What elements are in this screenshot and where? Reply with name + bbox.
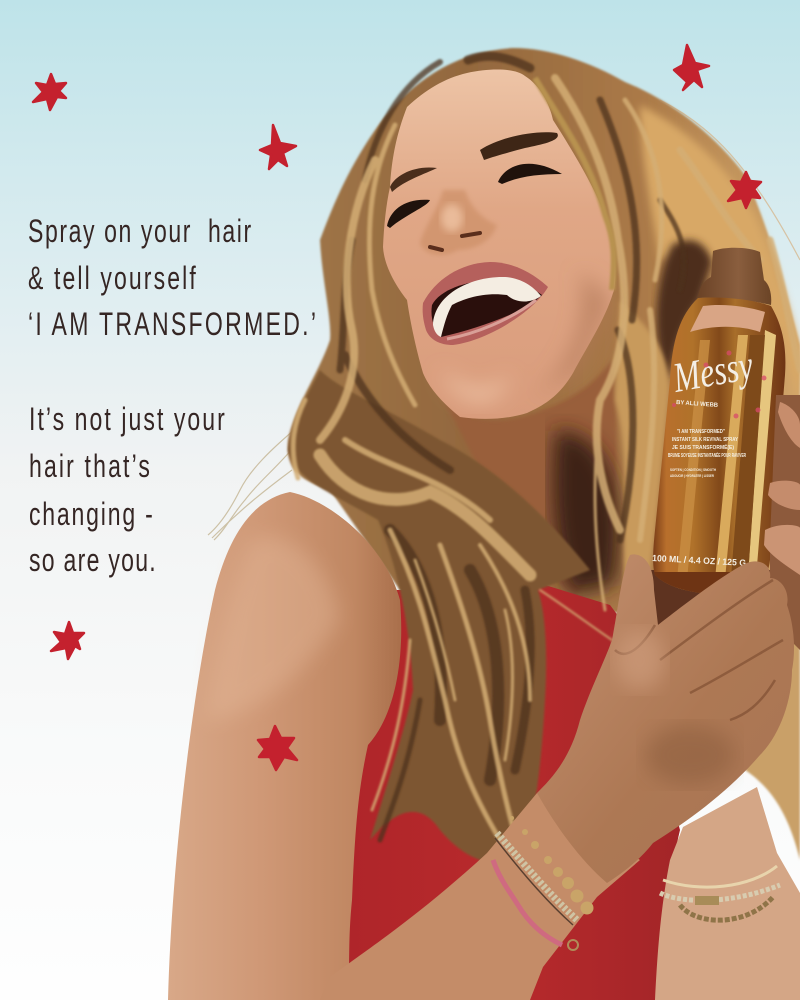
golden hair at lower right xyxy=(745,600,800,860)
star lower middle xyxy=(258,726,297,770)
label: product name: SOFTEN | CONDITION | SMOOTH xyxy=(670,467,716,472)
bottle body xyxy=(653,297,785,594)
shadow under bottle xyxy=(640,570,775,650)
shoulder highlight xyxy=(205,537,340,720)
logo: Messy: Messy xyxy=(669,343,757,402)
hair strands xyxy=(293,56,800,860)
bottle reflections xyxy=(654,330,776,593)
star top left xyxy=(33,74,66,110)
lips xyxy=(423,262,548,345)
star top right xyxy=(674,45,709,90)
text block: changing message: changing - xyxy=(29,496,153,532)
red top xyxy=(320,585,680,1000)
bottle shoulder highlight xyxy=(690,305,765,332)
label: product name: "I AM TRANSFORMED" xyxy=(677,429,726,435)
label: size text: 100 ML / 4.4 OZ / 125 G xyxy=(652,553,746,568)
label: product name xyxy=(668,429,746,478)
nose highlight xyxy=(441,204,463,232)
hair back mass xyxy=(288,48,800,620)
text block: spray message: ‘I AM TRANSFORMED.’ xyxy=(28,306,316,342)
hair left of the bottle xyxy=(615,300,668,590)
stars xyxy=(33,45,761,770)
bracelets left wrist xyxy=(493,816,594,950)
mouth interior xyxy=(431,281,542,337)
finger 2 xyxy=(768,481,800,510)
finger creases xyxy=(615,580,783,720)
bottle xyxy=(652,248,786,593)
eyebrow left xyxy=(390,167,437,192)
hand highlight xyxy=(615,630,665,690)
crystal band xyxy=(497,833,577,920)
bottle cap xyxy=(698,248,771,305)
crystal bracelet xyxy=(660,885,780,900)
thin gold bangle xyxy=(663,866,777,887)
star right xyxy=(728,172,761,208)
fingers on bottle xyxy=(764,395,800,650)
clasp xyxy=(695,896,719,905)
bracelets right wrist xyxy=(660,866,780,920)
woman xyxy=(168,48,800,1000)
hair front fall xyxy=(288,370,590,864)
cheek and jaw shading xyxy=(440,270,610,401)
finger 3 xyxy=(764,525,800,575)
right hair strand over face edge xyxy=(535,78,614,290)
teeth xyxy=(433,277,541,337)
label: product name: ADOUCIR | HYDRATER | LISSER xyxy=(670,473,714,478)
small chain xyxy=(568,940,578,950)
neck shadow xyxy=(552,430,620,595)
eye left xyxy=(387,200,430,228)
nostrils xyxy=(430,233,480,250)
stray hair wisps xyxy=(208,100,800,540)
neck xyxy=(440,360,617,595)
chain bracelet xyxy=(680,897,773,920)
text block: changing message: It’s not just your xyxy=(29,401,225,437)
text block: changing message xyxy=(29,401,225,578)
hand shading xyxy=(615,580,783,785)
right arm lower xyxy=(655,787,800,1000)
hand xyxy=(537,554,794,883)
nose xyxy=(420,190,497,255)
mouth xyxy=(423,262,548,345)
finger 1 xyxy=(778,402,800,448)
pink bead bracelet xyxy=(493,860,562,945)
face xyxy=(383,70,615,419)
label: product name: JE SUIS TRANSFORMÉ(E) xyxy=(672,443,734,451)
eyebrow right xyxy=(480,132,558,160)
star upper middle xyxy=(260,125,296,169)
text block: changing message: hair that’s xyxy=(29,448,150,484)
text block: spray message: & tell yourself xyxy=(28,260,196,296)
label: by Alli Webb: BY ALLI WEBB xyxy=(676,400,719,409)
hair dark area beside the bottle xyxy=(657,240,712,380)
left forearm xyxy=(320,793,640,1000)
crystal band shadow xyxy=(495,838,573,925)
eye right xyxy=(498,164,562,184)
bottle pink stars xyxy=(672,350,766,418)
star lower left xyxy=(51,622,84,659)
gold beads xyxy=(510,816,594,914)
left arm and shoulder xyxy=(168,492,401,1000)
golden strands xyxy=(293,78,800,860)
dark strands xyxy=(340,56,684,840)
text block: spray message xyxy=(28,213,316,342)
text block: changing message: so are you. xyxy=(29,542,156,578)
text block: spray message: Spray on your hair xyxy=(28,213,251,249)
lower lip highlight xyxy=(447,300,536,339)
hair golden right side xyxy=(640,105,800,410)
label: product name: INSTANT SILK REVIVAL SPRAY xyxy=(672,437,739,443)
knuckle shadow xyxy=(645,725,735,785)
hand behind bottle xyxy=(770,395,800,650)
label: product name: BRUME SOYEUSE INSTANTANÉE POUR RAVIVER xyxy=(668,451,746,459)
